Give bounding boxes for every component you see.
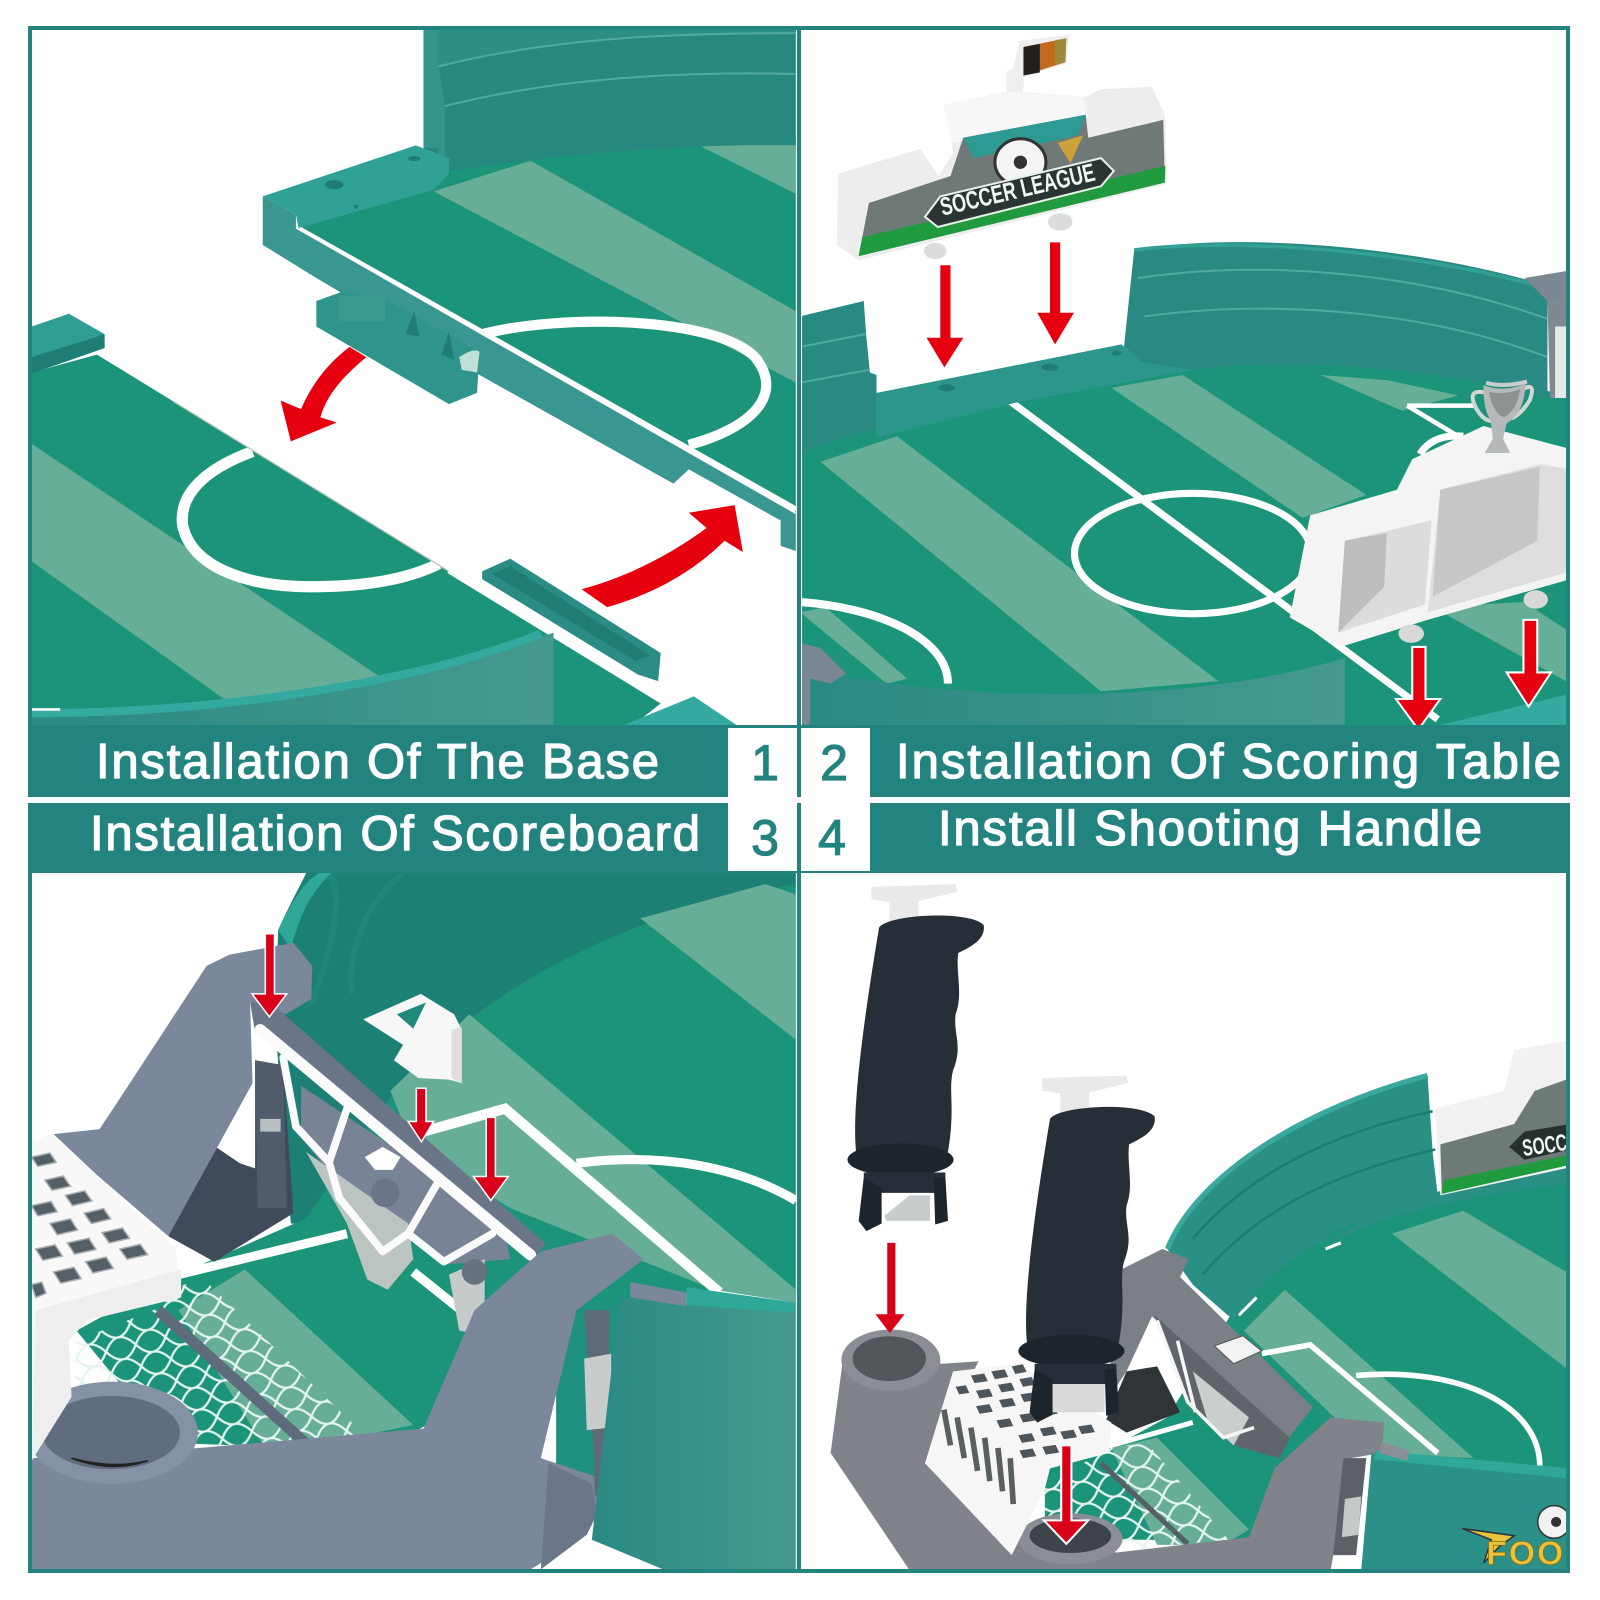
- wall rim: [278, 873, 332, 948]
- heading 2: Installation Of Scoring Table: [896, 735, 1561, 789]
- number box 3: [728, 803, 797, 871]
- number box 2: [802, 728, 870, 797]
- white goal cage: [32, 1134, 181, 1461]
- trophy: [1473, 382, 1532, 453]
- handle socket: [27, 1382, 198, 1484]
- front wall: [592, 1282, 796, 1569]
- football logo: [1462, 1506, 1600, 1572]
- white scoring clip: [363, 994, 462, 1083]
- board wall arc: [1167, 1076, 1438, 1320]
- header bar 3: [28, 803, 728, 873]
- white goal cage: [925, 1364, 1111, 1555]
- panel 1: installation of the base: [32, 30, 796, 726]
- number box 4: 4: [818, 810, 846, 866]
- front wall with logo: [1333, 1442, 1600, 1572]
- teal rules around number boxes and centre divider: [728, 28, 870, 1571]
- front wall: [800, 658, 1570, 726]
- scoreboard on board: [1435, 1040, 1570, 1195]
- gray goal tower: [54, 943, 312, 1236]
- header bar 4: [870, 802, 1570, 873]
- scoring rail: [250, 1002, 546, 1262]
- gray U base: [32, 1234, 644, 1569]
- red arrows down: [252, 934, 508, 1201]
- white score frame: [260, 1030, 531, 1262]
- red arrow right: [582, 505, 743, 607]
- connector tab with pegs: [316, 292, 480, 404]
- handle socket one: [841, 1330, 940, 1391]
- number box 1: 1: [751, 735, 779, 791]
- handle one: [847, 884, 984, 1231]
- scoring rail underside: [1155, 1315, 1290, 1458]
- handle two: [1018, 1076, 1155, 1422]
- number box 1: [728, 728, 797, 797]
- scoreboard with flag: [837, 35, 1167, 260]
- gray base: [831, 1356, 1384, 1570]
- handle socket two: [1018, 1513, 1122, 1564]
- scoreboard on board: SOCC: [1521, 1129, 1569, 1161]
- gray tower back shadow: [1106, 1366, 1180, 1433]
- red arrows down: [927, 242, 1551, 730]
- heading 3: Installation Of Scoreboard: [90, 807, 700, 861]
- connector slot rail: [482, 559, 661, 681]
- dark area behind hinge: [556, 1316, 618, 1476]
- number box 3: 3: [751, 810, 779, 866]
- scoreboard banner: [859, 115, 1165, 256]
- number box 4: [802, 803, 870, 871]
- field: [74, 884, 796, 1448]
- upper board edge rail: [263, 145, 796, 551]
- panel 4: install shooting handle: [831, 884, 1600, 1572]
- base edge band: [877, 344, 1193, 438]
- board top band: [1326, 1166, 1570, 1245]
- lower board field: [32, 314, 663, 726]
- scoreboard banner: SOCCER LEAGUE: [937, 159, 1098, 222]
- base shading: [541, 1463, 597, 1569]
- heading 1: Installation Of The Base: [96, 735, 659, 789]
- upper board stepped wall: [423, 30, 796, 171]
- heading 4: Install Shooting Handle: [938, 802, 1482, 856]
- header bar 2: [870, 725, 1570, 797]
- red arrow left: [281, 347, 366, 441]
- lower board curved wall: [32, 633, 737, 726]
- upper board field: [298, 138, 796, 513]
- white gap between header rows: [28, 797, 1570, 803]
- field: [800, 346, 1570, 730]
- gray goal corners: [800, 270, 1570, 724]
- panel 2: installation of scoring table: [800, 35, 1570, 730]
- panel 3: installation of scoreboard: [27, 873, 796, 1569]
- left wall stub: [800, 301, 877, 452]
- scoring table: [1290, 426, 1570, 647]
- slider inside frame: [306, 1147, 487, 1336]
- gray goal tower: [1106, 1249, 1313, 1443]
- white score frame: [1157, 1320, 1262, 1445]
- red arrows down: [876, 1243, 1088, 1544]
- number box 2: 2: [820, 735, 848, 791]
- back wall: [1124, 242, 1547, 398]
- header bar 1: [28, 725, 728, 797]
- hinge: [584, 1310, 611, 1514]
- back plate: [301, 1086, 510, 1264]
- field: [1045, 1172, 1570, 1550]
- goal tower back shadow: [168, 1060, 293, 1262]
- inner wall: [276, 873, 796, 1229]
